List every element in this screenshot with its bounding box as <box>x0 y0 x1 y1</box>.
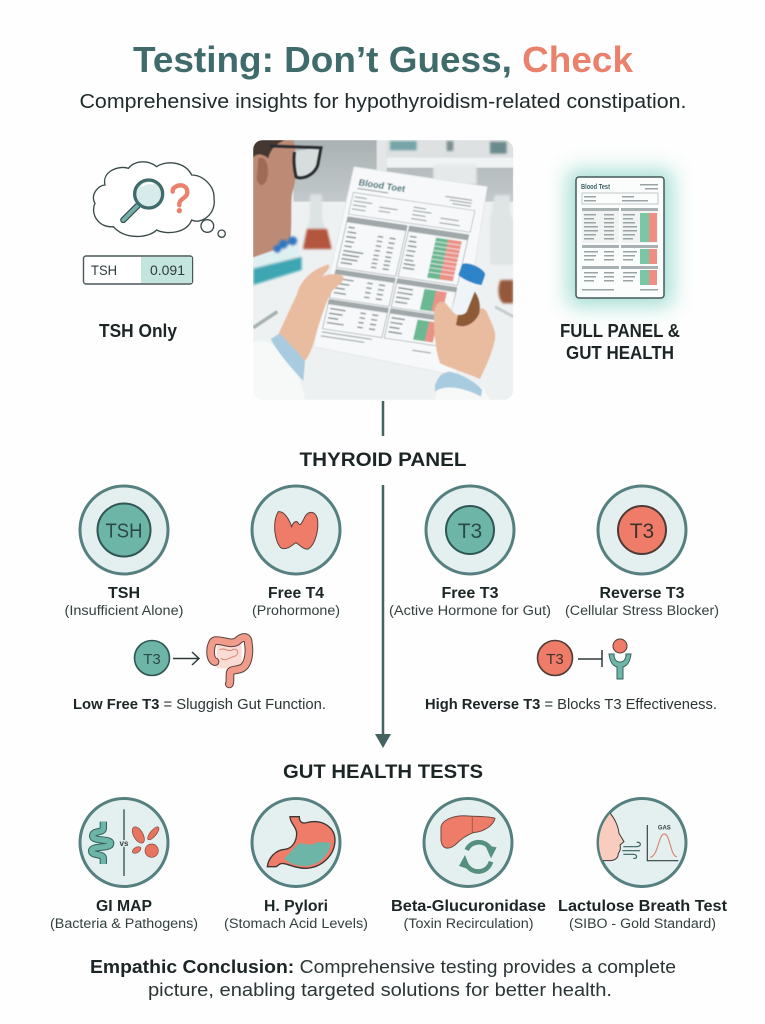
note: bacteria and pathogens: (Bacteria & Pathogens) <box>50 916 198 931</box>
TSH result box: TSH <box>91 262 117 278</box>
label: Lactulose Breath Test: Lactulose Breath Test <box>558 898 728 915</box>
conclusion: Empathic Conclusion: Comprehensive testing provides a complete <box>90 956 676 977</box>
label: Free T3: Free T3 <box>442 585 499 602</box>
icon: thought cloud with magnifier and question mark <box>93 162 225 237</box>
panel: GI MAP <box>50 798 198 931</box>
TSH result box: 0.091 <box>150 262 185 278</box>
conclusion <box>90 956 676 1000</box>
callout: high reverse T3 <box>425 639 717 713</box>
panel: Reverse T3 marker <box>565 486 719 618</box>
icon: T3 blocked from receptor: T3 <box>546 651 564 668</box>
note: active hormone for gut: (Active Hormone for Gut) <box>389 603 551 618</box>
label: GI MAP: GI MAP <box>96 898 152 915</box>
paper: Blood Toet <box>358 177 406 194</box>
pen <box>253 312 277 328</box>
TSH result box <box>84 256 192 284</box>
label: TSH Only: TSH Only <box>99 321 177 341</box>
icon: T3 to intestine: T3 <box>143 651 161 668</box>
icon: thyroid gland <box>252 486 340 574</box>
heading: thyroid panel: THYROID PANEL <box>300 450 467 471</box>
icon: TSH circle: TSH <box>106 520 142 542</box>
subtitle: Comprehensive insights for hypothyroidism-related constipation. <box>80 90 686 113</box>
right hand <box>434 302 495 379</box>
right flask <box>498 280 513 303</box>
note: SIBO gold standard: (SIBO - Gold Standard) <box>569 916 716 931</box>
icon: Reverse T3 circle: T3 <box>630 520 654 543</box>
icon: T3 blocked from receptor <box>538 639 631 679</box>
panel: TSH only <box>84 162 225 341</box>
panel: full panel and gut health <box>560 170 680 363</box>
icon: breath with gas curve: GAS <box>658 825 671 831</box>
text: high reverse T3: High Reverse T3 = Blocks T3 Effectiveness. <box>425 696 717 713</box>
note: stomach acid levels: (Stomach Acid Levels) <box>224 916 368 931</box>
icon: glowing report: Blood Test <box>581 182 610 191</box>
icon: stomach <box>252 798 340 886</box>
note: cellular stress blocker: (Cellular Stress Blocker) <box>565 603 719 618</box>
icon: Free T3 circle: T3 <box>458 520 482 543</box>
icon: Reverse T3 circle <box>598 486 686 574</box>
note: toxin recirculation: (Toxin Recirculation) <box>404 916 534 931</box>
left hand <box>278 264 344 362</box>
label: TSH: TSH <box>108 585 140 602</box>
icon: T3 to intestine <box>134 637 249 684</box>
icon: liver with recirculation <box>424 798 512 886</box>
tube rack <box>253 236 302 285</box>
label: Free T4: Free T4 <box>268 585 324 602</box>
title: Testing: Don’t Guess, Check <box>133 39 634 80</box>
note: insufficient alone: (Insufficient Alone) <box>64 603 184 618</box>
panel: Beta-Glucuronidase <box>391 798 546 931</box>
text: low free T3: Low Free T3 = Sluggish Gut Function. <box>73 696 326 713</box>
heading: gut health tests: GUT HEALTH TESTS <box>283 762 483 783</box>
icon: healthy gut vs pathogens <box>80 798 168 886</box>
arrow: central flow to gut health <box>375 485 391 748</box>
flask <box>308 194 324 229</box>
lab coat and sleeves <box>253 341 305 400</box>
icon: Free T3 circle <box>426 486 514 574</box>
icon: glowing report <box>568 170 672 306</box>
label: full panel and gut health: FULL PANEL & <box>560 321 680 341</box>
label: Reverse T3: Reverse T3 <box>600 585 685 602</box>
paper <box>320 166 488 354</box>
panel: TSH marker <box>64 486 184 618</box>
conclusion: picture, enabling targeted solutions for better health. <box>148 979 612 1000</box>
label: full panel and gut health: GUT HEALTH <box>566 343 674 363</box>
left tables <box>347 217 407 231</box>
photo: clinician reading a blood test <box>253 140 513 400</box>
panel: Lactulose breath test <box>558 798 728 931</box>
panel: H. Pylori <box>224 798 368 931</box>
label: H. Pylori: H. Pylori <box>264 898 328 915</box>
label: full panel and gut health <box>560 321 680 363</box>
sample tube <box>452 263 485 326</box>
panel: Free T3 marker <box>389 486 551 618</box>
icon: healthy gut vs pathogens: vs <box>120 839 129 848</box>
connector line from photo to heading <box>382 401 384 436</box>
panel: Free T4 marker <box>252 486 340 618</box>
callout: low free T3 <box>73 637 326 713</box>
icon: breath with gas curve <box>598 798 686 886</box>
right tables <box>408 226 469 240</box>
note: prohormone: (Prohormone) <box>252 603 340 618</box>
label: Beta-Glucuronidase: Beta-Glucuronidase <box>391 898 546 915</box>
clinician head <box>253 140 296 258</box>
